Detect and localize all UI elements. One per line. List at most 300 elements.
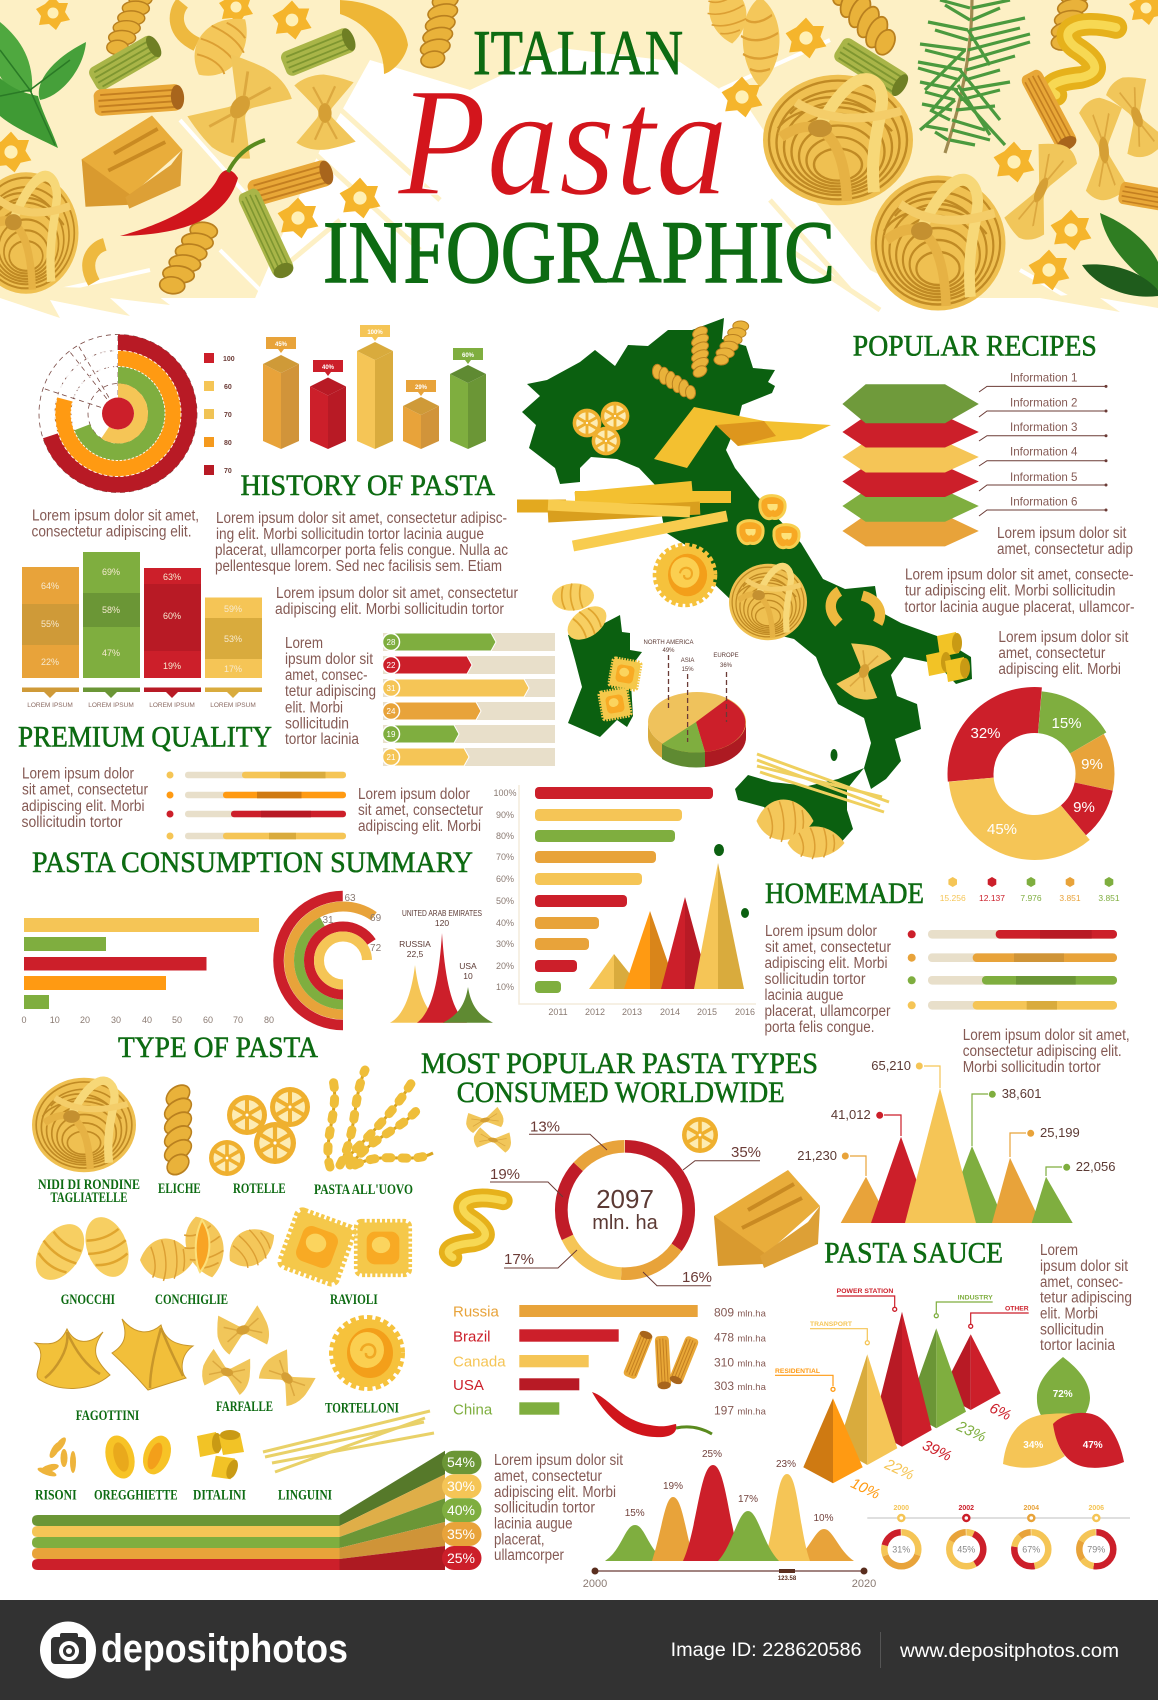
- icon: risoni: [37, 1436, 76, 1478]
- icon: wavy pasta: [448, 1198, 503, 1257]
- bell curve chart: 19%: [663, 1481, 683, 1492]
- text block: homemade: [764, 923, 891, 1036]
- text block: bottom: placerat,: [494, 1531, 544, 1548]
- icon: rotella: [682, 1117, 718, 1153]
- arrow progress bars: 31: [387, 684, 396, 693]
- heading: homemade: HOMEMADE: [765, 877, 924, 910]
- rounded bar chart with axis: 2016: [735, 1007, 755, 1017]
- rising band chart: 54%: [447, 1454, 475, 1470]
- stacked bar chart: LOREM IPSUM: [210, 702, 256, 709]
- map pasta: conchiglie: [756, 800, 844, 859]
- rounded bar chart with axis: 50%: [496, 896, 514, 906]
- pasta name labels: OREGGHIETTE: [94, 1487, 178, 1503]
- spike chart: countries: 22,5: [407, 949, 424, 959]
- rounded bar chart with axis: 2013: [622, 1007, 642, 1017]
- footer bar: [0, 1600, 1158, 1700]
- timeline donuts: 2002: [959, 1505, 974, 1512]
- pasta name labels: RAVIOLI: [330, 1292, 378, 1308]
- pasta name labels: CONCHIGLIE: [155, 1292, 228, 1308]
- pasta name labels: TORTELLONI: [325, 1401, 399, 1417]
- icon: gnocchi: [26, 1211, 136, 1289]
- stacked bar chart: 69%: [102, 567, 120, 577]
- pyramid chart: 23%: [953, 1417, 988, 1446]
- map pasta: pappardelle: [654, 407, 831, 468]
- legend: homemade values: [940, 877, 1120, 903]
- horizontal bar chart: 40: [142, 1015, 152, 1025]
- text block: left of arrow bars: sollicitudin: [285, 716, 349, 732]
- radial chart legend: 80: [224, 440, 232, 447]
- 3D pie chart: NORTH AMERICA: [644, 640, 693, 646]
- title: Pasta: Pasta: [397, 56, 728, 228]
- slider bars: homemade: [908, 930, 1117, 1010]
- text block: bottom: ullamcorper: [494, 1547, 564, 1564]
- heading: most popular pasta types: MOST POPULAR PASTA TYPES: [421, 1047, 818, 1080]
- pasta name labels: TAGLIATELLE: [50, 1190, 128, 1206]
- heading: most popular pasta types: [421, 1047, 818, 1109]
- map pasta: bucatini: [517, 486, 731, 546]
- pasta name labels: NIDI DI RONDINE: [38, 1177, 140, 1193]
- text block: left caption: consectetur adipiscing elit.: [32, 524, 192, 540]
- 3D pie chart: EUROPE: [713, 653, 739, 659]
- text block: beside sliders: Lorem ipsum dolor: [358, 786, 470, 803]
- heading: pasta sauce: PASTA SAUCE: [824, 1237, 1003, 1270]
- half-ring radial chart: 31: [322, 915, 334, 926]
- text block: pasta sauce: elit. Morbi: [1040, 1305, 1098, 1322]
- text block: recipes long: [904, 567, 1134, 616]
- map of Italy: [517, 314, 972, 918]
- map pasta: shells: [738, 496, 799, 548]
- icon: farfalle: [198, 1304, 319, 1410]
- legend: homemade values: 15.256: [940, 893, 966, 903]
- horizontal bar chart: 20: [80, 1015, 90, 1025]
- pyramid chart: [775, 1288, 1029, 1503]
- icon: red chili pepper: [120, 140, 265, 236]
- slider bars: premium quality: [166, 772, 346, 840]
- stacked bar chart: [22, 552, 262, 709]
- 3D pie chart: ASIA: [681, 658, 694, 664]
- text block: history: placerat, ullamcorper porta felis congue. Nulla ac: [215, 542, 508, 559]
- small islands: [714, 749, 838, 918]
- icon: small farfalle: [464, 1106, 513, 1153]
- map pasta: tortelloni: [656, 546, 714, 604]
- text block: above donut: Lorem ipsum dolor sit: [998, 629, 1129, 646]
- donut chart: large: 15%: [1051, 715, 1082, 732]
- rounded bar chart with axis: 100%: [493, 788, 517, 798]
- timeline donuts: 2006: [1089, 1505, 1104, 1512]
- text block: above mountain chart: Morbi sollicitudin tortor: [963, 1059, 1101, 1076]
- rounded bar chart with axis: 70%: [496, 852, 514, 862]
- text block: above donut: [998, 629, 1129, 678]
- pasta name labels: FAGOTTINI: [76, 1408, 140, 1424]
- stacked bar chart: 58%: [102, 605, 120, 615]
- map pasta: gnocchi: [551, 582, 613, 647]
- horizontal bar chart: 80: [264, 1015, 274, 1025]
- text block: homemade: sit amet, consectetur: [765, 939, 891, 956]
- donut chart: 2097 mln. ha: 2097: [596, 1184, 654, 1214]
- text block: pasta sauce: sollicitudin: [1040, 1321, 1104, 1338]
- horizontal bar chart: 30: [111, 1015, 121, 1025]
- text block: homemade: placerat, ullamcorper: [764, 1003, 890, 1020]
- mountain chart: 38,601: [1002, 1086, 1041, 1101]
- bell curve chart: 25%: [702, 1449, 722, 1460]
- rounded bar chart with axis: 10%: [496, 982, 514, 992]
- pasta name labels: RISONI: [35, 1487, 77, 1503]
- text block: above donut: adipiscing elit. Morbi: [998, 661, 1121, 678]
- donut leader labels: 19%: [490, 1166, 520, 1183]
- icon: eliche: [162, 1081, 194, 1179]
- pasta name labels: PASTA ALL'UOVO: [314, 1182, 413, 1198]
- arrow progress bars: 28: [387, 638, 396, 647]
- pasta name labels: DITALINI: [193, 1487, 246, 1503]
- stacked bar chart: 47%: [102, 648, 120, 658]
- text block: left of arrow bars: amet, consec-: [285, 667, 368, 684]
- icon: tortelloni: [333, 1319, 401, 1387]
- pyramid chart: TRANSPORT: [810, 1321, 852, 1328]
- text block: pasta sauce: tortor lacinia: [1040, 1337, 1115, 1354]
- pyramid chart: 10%: [848, 1475, 882, 1503]
- text block: bottom: amet, consectetur: [494, 1468, 602, 1485]
- stacked bar chart: 19%: [163, 661, 181, 671]
- text block: pasta sauce: [1040, 1242, 1132, 1354]
- 3D bar chart: 60%: [462, 353, 475, 359]
- text block: homemade: porta felis congue.: [764, 1019, 874, 1036]
- information labels: Information 3: [1010, 420, 1078, 434]
- website: www.depositphotos.com: [899, 1641, 1119, 1662]
- rounded bar chart with axis: 40%: [496, 918, 514, 928]
- text block: recipes short: amet, consectetur adip: [997, 541, 1133, 558]
- pyramid chart: 39%: [920, 1437, 954, 1465]
- country bar chart: [453, 1304, 767, 1418]
- text block: left of arrow bars: [285, 635, 376, 748]
- 3D bar chart: 29%: [415, 385, 428, 391]
- 3D bar chart: 45%: [275, 342, 288, 348]
- text block: beside sliders: [358, 786, 483, 835]
- bell curve chart: 123.58: [778, 1576, 797, 1582]
- pasta name labels: [35, 1177, 413, 1503]
- pyramid chart: OTHER: [1005, 1306, 1029, 1312]
- country bar chart: Brazil: [453, 1329, 491, 1346]
- donut leader labels: 35%: [731, 1144, 761, 1161]
- pasta name labels: ELICHE: [158, 1181, 201, 1197]
- text block: bottom: sollicitudin tortor: [494, 1500, 595, 1517]
- stacked bar chart: 63%: [163, 572, 181, 582]
- image id: Image ID: 228620586: [671, 1640, 862, 1661]
- 3D bar chart: 40%: [322, 365, 335, 371]
- timeline donuts: 31%: [892, 1544, 910, 1554]
- text block: left of arrow bars: tortor lacinia: [285, 731, 359, 748]
- information labels: Information 6: [1010, 494, 1078, 508]
- donut chart: large: 9%: [1081, 756, 1103, 773]
- stacked bar chart: 22%: [41, 657, 59, 667]
- information labels: [979, 370, 1108, 516]
- country bar chart: Russia: [453, 1304, 500, 1321]
- Sicily: [735, 768, 864, 854]
- country bar chart: 303 mln.ha: [714, 1379, 767, 1393]
- mountain chart: 25,199: [1040, 1125, 1080, 1140]
- rising band chart: 30%: [447, 1478, 475, 1494]
- donut leader labels: [490, 1119, 761, 1286]
- text block: homemade: adipiscing elit. Morbi: [764, 955, 888, 972]
- donut chart: large: [945, 685, 1124, 863]
- rounded bar chart with axis: 2015: [697, 1007, 717, 1017]
- rounded bar chart with axis: 2011: [548, 1007, 568, 1017]
- layered hexagon chart: [842, 370, 1108, 546]
- arrow progress bars: 19: [387, 730, 396, 739]
- timeline donuts: 79%: [1087, 1544, 1105, 1554]
- text block: bottom: lacinia augue: [494, 1515, 572, 1532]
- bell curve chart: 2020: [852, 1578, 876, 1590]
- pyramid chart: INDUSTRY: [958, 1294, 993, 1302]
- icon: fagottini: [35, 1319, 193, 1390]
- icon: left pasta group: [0, 0, 464, 305]
- petal chart: 47%: [1083, 1440, 1103, 1451]
- legend: homemade values: 12.137: [979, 893, 1005, 903]
- text block: history: pellentesque lorem. Sed nec facilisis sem. Etiam: [215, 558, 502, 575]
- map pasta: farfalle: [834, 639, 893, 705]
- pyramid chart: 22%: [881, 1455, 916, 1484]
- text block: recipes long: tur adipiscing elit. Morbi sollicitudin: [905, 583, 1116, 600]
- text block: left of arrow bars: tetur adipiscing: [285, 683, 376, 700]
- petal chart: 34%: [1023, 1440, 1043, 1451]
- text block: pasta sauce: Lorem: [1040, 1242, 1078, 1259]
- radial chart legend: 60: [224, 384, 232, 391]
- icon: bay leaves: [1082, 213, 1158, 297]
- arrow progress bars: 24: [387, 707, 396, 716]
- icon: orecchiette: [101, 1432, 176, 1482]
- brand name: depositphotos: [101, 1627, 348, 1671]
- map pasta: rotelle: [573, 402, 629, 455]
- rounded bar chart with axis: 80%: [496, 831, 514, 841]
- heading: history of pasta: HISTORY OF PASTA: [240, 469, 495, 502]
- text block: pasta sauce: tetur adipiscing: [1040, 1290, 1132, 1307]
- horizontal bar chart: 10: [50, 1015, 60, 1025]
- country bar chart: 197 mln.ha: [714, 1403, 767, 1417]
- text block: left of arrow bars: elit. Morbi: [285, 700, 343, 716]
- spike chart: countries: 10: [463, 971, 473, 981]
- arrow progress bars: 22: [387, 661, 396, 670]
- bell curve chart: 15%: [625, 1508, 645, 1519]
- arrow progress bars: [382, 633, 555, 766]
- pasta name labels: ROTELLE: [233, 1181, 286, 1197]
- text block: left of arrow bars: Lorem: [285, 635, 323, 652]
- text block: pasta sauce: amet, consec-: [1040, 1274, 1123, 1291]
- icon: linguini: [263, 1411, 434, 1472]
- stacked bar chart: 60%: [163, 611, 181, 621]
- stacked bar chart: LOREM IPSUM: [149, 702, 195, 709]
- pyramid chart: POWER STATION: [837, 1288, 894, 1295]
- spike chart: countries: [390, 908, 493, 1023]
- Sardinia: [568, 615, 642, 737]
- information labels: Information 1: [1010, 370, 1078, 384]
- icon: pasta all'uovo: [328, 1070, 433, 1167]
- bell curve chart: 17%: [738, 1494, 758, 1505]
- arrow progress bars: 21: [387, 753, 396, 762]
- text block: beside sliders: sit amet, consectetur: [358, 802, 483, 819]
- icon: basil leaves: [0, 22, 86, 148]
- icon: penne trio: [623, 1329, 699, 1390]
- pasta catalogue: [26, 1070, 434, 1503]
- mountain chart: [797, 1058, 1115, 1223]
- pasta name labels: GNOCCHI: [61, 1292, 115, 1308]
- icon: nidi di rondine: [32, 1078, 136, 1172]
- timeline donuts: 2004: [1024, 1505, 1039, 1512]
- text block: above mountain chart: consectetur adipiscing elit.: [963, 1043, 1122, 1060]
- stacked bar chart: 55%: [41, 619, 59, 629]
- horizontal bar chart: 70: [233, 1015, 243, 1025]
- rising band chart: 40%: [447, 1502, 475, 1518]
- text block: history: ing elit. Morbi sollicitudin tortor lacinia augue: [216, 526, 484, 543]
- timeline donuts: 2000: [894, 1505, 909, 1512]
- text block: beside sliders: adipiscing elit. Morbi: [358, 818, 481, 835]
- 3D bar chart: [263, 325, 486, 449]
- timeline donuts: 45%: [957, 1544, 975, 1554]
- timeline donuts: 67%: [1022, 1544, 1040, 1554]
- text block: above mountain chart: Lorem ipsum dolor sit amet,: [963, 1027, 1130, 1044]
- horizontal bar chart: 0: [21, 1015, 27, 1025]
- donut chart: 2097 mln. ha: [490, 1119, 761, 1286]
- text block: above donut: amet, consectetur: [998, 645, 1105, 662]
- spike chart: countries: UNITED ARAB EMIRATES: [402, 908, 482, 918]
- rising band chart: 25%: [447, 1550, 475, 1566]
- text block: homemade: Lorem ipsum dolor: [765, 923, 877, 940]
- spike chart: countries: RUSSIA: [399, 939, 431, 949]
- legend: homemade values: 7.976: [1020, 893, 1042, 903]
- rising band chart: 35%: [447, 1526, 475, 1542]
- icon: ravioli: [280, 1210, 408, 1284]
- text block: left of arrow bars: ipsum dolor sit: [285, 651, 374, 668]
- rising band chart: [32, 1451, 482, 1570]
- donut chart: large: 45%: [987, 821, 1017, 838]
- country bar chart: USA: [453, 1377, 484, 1394]
- heading: premium quality: PREMIUM QUALITY: [18, 720, 272, 754]
- country bar chart: 809 mln.ha: [714, 1306, 767, 1320]
- half-ring radial chart: 72: [370, 943, 382, 954]
- country bar chart: Canada: [453, 1354, 506, 1371]
- heading: popular recipes: POPULAR RECIPES: [853, 329, 1097, 362]
- donut leader labels: 13%: [530, 1119, 560, 1136]
- text block: recipes short: [997, 525, 1133, 558]
- petal chart: [1003, 1357, 1124, 1468]
- donut leader labels: 17%: [504, 1251, 534, 1268]
- pasta name labels: LINGUINI: [278, 1487, 332, 1503]
- 3D pie chart: [644, 640, 746, 767]
- radial chart legend: 70: [224, 412, 232, 419]
- radial chart: [39, 334, 235, 492]
- map pasta: nest: [729, 564, 807, 640]
- text block: recipes short: Lorem ipsum dolor sit: [997, 525, 1127, 542]
- donut chart: large: 32%: [970, 725, 1001, 742]
- heading: type of pasta: TYPE OF PASTA: [118, 1031, 318, 1064]
- stacked bar chart: LOREM IPSUM: [88, 702, 134, 709]
- text block: history: [215, 510, 508, 575]
- icon: rotelle: [209, 1087, 310, 1176]
- text block: above arrow bars: [275, 585, 518, 618]
- radial chart legend: [204, 353, 235, 475]
- mountain chart: 65,210: [871, 1058, 911, 1073]
- text block: bottom: [494, 1452, 624, 1564]
- map pasta: ravioli: [599, 658, 641, 720]
- horizontal bar chart: 50: [172, 1015, 182, 1025]
- header banner: [0, 0, 1158, 318]
- text block: premium quality: adipiscing elit. Morbi: [22, 798, 144, 815]
- stacked bar chart: 17%: [224, 664, 242, 674]
- bell curve chart: [583, 1449, 876, 1590]
- bell curve chart: 2000: [583, 1578, 607, 1590]
- 3D bar chart: 100%: [367, 330, 383, 336]
- donut leader labels: 16%: [682, 1269, 712, 1286]
- rounded bar chart with axis: 60%: [496, 874, 514, 884]
- 3D pie chart: 15%: [682, 667, 694, 673]
- half-ring radial chart: [278, 893, 408, 1025]
- country bar chart: China: [453, 1401, 493, 1418]
- icon: right pasta group: [703, 0, 1158, 310]
- stacked bar chart: LOREM IPSUM: [27, 702, 73, 709]
- stacked bar chart: 64%: [41, 581, 59, 591]
- horizontal bar chart: [21, 918, 274, 1025]
- mountain chart: 22,056: [1076, 1159, 1115, 1174]
- 3D pie chart: 36%: [720, 663, 733, 669]
- icon: camera logo: [40, 1622, 96, 1678]
- map pasta: fusilli: [646, 314, 754, 404]
- text block: premium quality: sollicitudin tortor: [22, 814, 122, 831]
- text block: left caption: [32, 508, 199, 540]
- radial chart legend: 100: [223, 356, 235, 363]
- title: Infographic: INFOGRAPHIC: [323, 204, 835, 302]
- legend: homemade values: 3.851: [1098, 893, 1120, 903]
- text block: pasta sauce: ipsum dolor sit: [1040, 1258, 1129, 1275]
- bell curve chart: 23%: [776, 1459, 796, 1470]
- rounded bar chart with axis: 90%: [496, 810, 514, 820]
- mountain chart: 41,012: [831, 1107, 871, 1122]
- rounded bar chart with axis: 30%: [496, 939, 514, 949]
- information labels: Information 5: [1010, 470, 1078, 484]
- icon: rosemary sprig: [918, 0, 1030, 153]
- icon: chili pepper: [592, 1392, 712, 1437]
- text block: bottom: Lorem ipsum dolor sit: [494, 1452, 624, 1469]
- information labels: Information 2: [1010, 395, 1078, 409]
- text block: above mountain chart: [963, 1027, 1130, 1076]
- icon: pasta sheet: [714, 1170, 820, 1268]
- text block: premium quality: [22, 766, 148, 831]
- half-ring radial chart: 69: [370, 913, 382, 924]
- country bar chart: 310 mln.ha: [714, 1356, 767, 1370]
- text block: above arrow bars: adipiscing elit. Morbi sollicitudin tortor: [275, 601, 504, 618]
- pasta name labels: FARFALLE: [216, 1399, 273, 1415]
- rounded bar chart with axis: 2014: [660, 1007, 680, 1017]
- text block: above arrow bars: Lorem ipsum dolor sit amet, consectetur: [276, 585, 518, 602]
- title: Italian: ITALIAN: [473, 18, 683, 88]
- heading: most popular pasta types: CONSUMED WORLDWIDE: [457, 1076, 785, 1109]
- text block: premium quality: sit amet, consectetur: [22, 782, 148, 798]
- bell curve chart: 10%: [813, 1513, 834, 1524]
- horizontal bar chart: 60: [203, 1015, 213, 1025]
- pyramid chart: 6%: [987, 1400, 1014, 1424]
- donut chart: 2097 mln. ha: mln. ha: [592, 1212, 659, 1234]
- stacked bar chart: 53%: [224, 634, 242, 644]
- icon: conchiglie: [140, 1212, 283, 1282]
- text block: homemade: sollicitudin tortor: [764, 971, 866, 988]
- rounded bar chart with axis: 2012: [585, 1007, 605, 1017]
- petal chart: 72%: [1053, 1389, 1073, 1400]
- legend: homemade values: 3.851: [1059, 893, 1081, 903]
- timeline donuts: [867, 1505, 1130, 1566]
- map pasta: linguine: [757, 754, 889, 812]
- spike chart: countries: USA: [459, 961, 477, 971]
- 3D pie chart: 49%: [662, 648, 675, 654]
- mountain chart: 21,230: [797, 1148, 837, 1163]
- text block: bottom: adipiscing elit. Morbi: [494, 1484, 616, 1501]
- text block: homemade: lacinia augue: [764, 987, 844, 1004]
